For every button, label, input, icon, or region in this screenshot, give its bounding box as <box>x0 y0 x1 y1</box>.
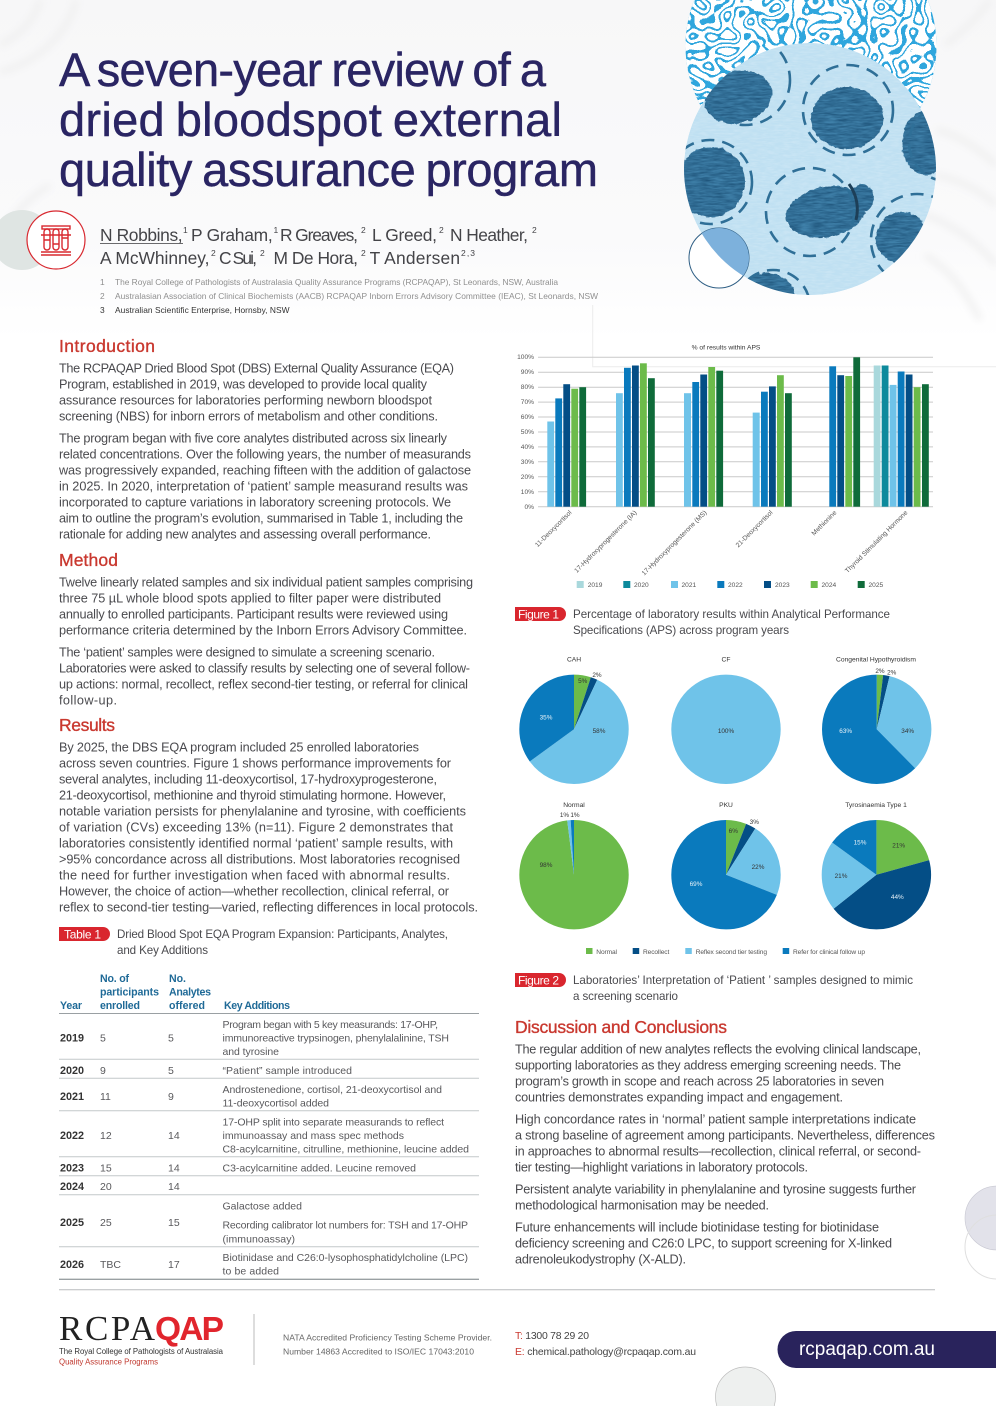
graphic: pattern circle <box>686 0 936 108</box>
figure 1 caption: Figure 1 <box>518 607 559 621</box>
row 2025: Recording calibrator lot numbers for: TSH and 17-OHP <box>222 1220 468 1232</box>
row 2026: to be added <box>222 1266 279 1278</box>
figure 1 caption: Specifications (APS) across program years <box>573 624 789 637</box>
pie: CAH <box>540 656 606 757</box>
row 2020: 9 <box>100 1065 106 1077</box>
bars: 17-Hydroxyprogesterone (MS) <box>684 367 723 507</box>
x axis labels: Thyroid Stimulating Hormone <box>844 509 910 575</box>
row 2020: 5 <box>168 1065 174 1077</box>
pie: Tyrosinaemia Type 1: 21% <box>835 873 848 880</box>
figure 1 caption <box>515 607 890 637</box>
y axis labels: 90% <box>521 369 534 376</box>
footer contact details: T: 1300 78 29 20 <box>515 1331 589 1342</box>
footer accreditation text: Number 14863 Accredited to ISO/IEC 17043:2010 <box>283 1346 474 1356</box>
text: results paragraph: of variation (CVs) exceeding 13% (n=11). Figure 2 demonstrates that <box>59 820 453 834</box>
pie: PKU: 3% <box>750 819 759 826</box>
y axis labels: 10% <box>521 489 534 496</box>
table header: No. <box>169 973 186 985</box>
affiliations: 2 <box>100 291 105 301</box>
row 2023: 15 <box>100 1162 112 1174</box>
text: discussion paragraph 2: in approaches to abnormal results—recollection, clinical referral, or second- <box>515 1144 921 1158</box>
panel: method <box>59 550 473 707</box>
row 2021: 11 <box>100 1091 111 1103</box>
row 2025: 25 <box>100 1217 112 1229</box>
y axis labels: 30% <box>521 459 534 466</box>
text: results paragraph: notable variation persists for phenylalanine and tyrosine, with coefficients <box>59 804 466 818</box>
footer contact details <box>515 1331 696 1358</box>
text: discussion paragraph 1: countries demonstrates expanding impact and engagement. <box>515 1090 843 1104</box>
footer website pill: rcpaqap.com.au <box>799 1339 935 1360</box>
pie: CAH: 58% <box>593 728 606 735</box>
authors: R Greaves, <box>280 225 358 245</box>
heading: introduction: Introduction <box>59 336 155 356</box>
pie: Congenital Hypothyroidism <box>836 656 916 757</box>
text: method paragraph 2: The ‘patient’ samples were designed to simulate a screening scenario. <box>59 645 435 659</box>
text: results paragraph: laboratories consistently identified normal ‘patient’ sample results, with <box>59 836 453 850</box>
table header: Year <box>60 1000 82 1012</box>
panel: introduction <box>58 336 471 541</box>
pie: Congenital Hypothyroidism: 63% <box>839 728 852 735</box>
footer logo: RCPAQAP: RCPA <box>59 1309 156 1348</box>
y axis labels: 0% <box>524 504 534 511</box>
x axis labels: 11-Deoxycortisol <box>534 509 574 549</box>
table 1 caption: Dried Blood Spot EQA Program Expansion: Participants, Analytes, <box>117 928 448 941</box>
table 1 <box>59 973 479 1279</box>
icon: test tubes in circle <box>0 210 85 270</box>
pie: Congenital Hypothyroidism: 34% <box>901 728 914 735</box>
authors: 1 <box>274 225 278 235</box>
row 2022: 17-OHP split into separate measurands to reflect <box>222 1116 444 1128</box>
x axis labels: 21-Deoxycortisol <box>735 509 775 549</box>
table 1 caption: and Key Additions <box>117 944 208 957</box>
text: discussion paragraph 4 <box>515 1220 892 1266</box>
text: method paragraph 2: Laboratories were asked to classify results by selecting one of several follow- <box>59 661 470 675</box>
authors: 2 <box>260 248 265 258</box>
text: discussion paragraph 1 <box>515 1042 921 1104</box>
affiliations: 3 <box>100 305 105 315</box>
affiliations: Australasian Association of Clinical Biochemists (AACB) RCPAQAP Inborn Errors Advisory Committee (IEAC), St Leonards, NSW <box>115 291 598 301</box>
row 2024: 2024 <box>60 1181 84 1193</box>
pie: Tyrosinaemia Type 1: 44% <box>891 894 904 901</box>
pie chart legend: Recollect <box>643 949 669 956</box>
text: introduction paragraph 2: related concentrations. Over the following years, the number of measurands <box>59 447 471 461</box>
pie: PKU: 69% <box>690 881 703 888</box>
figure 2 caption: Figure 2 <box>518 973 559 987</box>
table header: No. of <box>100 973 129 985</box>
pie chart legend <box>586 948 865 956</box>
row 2022: 14 <box>168 1130 180 1142</box>
affiliations: The Royal College of Pathologists of Australasia Quality Assurance Programs (RCPAQAP), St Leonards, NSW, Australia <box>115 277 558 287</box>
row 2019 <box>60 1019 449 1058</box>
row 2022: 2022 <box>60 1130 84 1142</box>
bars: 11-Deoxycortisol <box>547 384 586 507</box>
table header: Key Additions <box>224 1000 290 1012</box>
pie: PKU: PKU <box>719 802 733 809</box>
authors: 1 <box>183 225 188 235</box>
pie: Tyrosinaemia Type 1: 21% <box>892 842 905 850</box>
footer logo: RCPAQAP: Quality Assurance Programs <box>59 1358 158 1366</box>
pie: Tyrosinaemia Type 1: Tyrosinaemia Type 1 <box>845 802 907 809</box>
authors: 2 <box>532 225 537 235</box>
pie: CF <box>671 656 781 784</box>
affiliations: 1 <box>100 277 105 287</box>
bars: 17-Hydroxyprogesterone (IA) <box>616 363 655 507</box>
y axis labels: 100% <box>517 354 534 361</box>
pie chart legend: Reflex second tier testing <box>696 949 767 956</box>
bar chart legend: 2020 <box>634 582 649 589</box>
dashed rings <box>686 51 936 295</box>
text: discussion paragraph 2 <box>515 1112 935 1174</box>
pie: Tyrosinaemia Type 1 <box>835 802 907 902</box>
text: discussion paragraph 1: The regular addition of new analytes reflects the evolving clinical landscape, <box>515 1042 921 1056</box>
pie: CAH: 35% <box>540 714 553 722</box>
text: introduction paragraph 2: was progressively expanded, reaching fifteen with the addition of galactose <box>58 463 471 477</box>
text: method paragraph 1 <box>59 575 473 637</box>
pie: Normal <box>540 802 601 902</box>
text: discussion paragraph 3 <box>515 1182 917 1212</box>
graphic: dried blood spot photo <box>684 43 936 295</box>
pie: PKU <box>690 802 765 902</box>
x axis labels: Methionine <box>811 509 839 537</box>
row 2021: 11-deoxycortisol added <box>222 1097 329 1109</box>
bar chart legend: 2022 <box>728 582 743 589</box>
text: introduction paragraph 2: in 2025. In 2020, interpretation of ‘patient’ sample measurand results was <box>59 479 468 493</box>
row 2025: 15 <box>168 1217 180 1229</box>
affiliations: Australian Scientific Enterprise, Hornsby, NSW <box>115 305 290 315</box>
text: discussion paragraph 2: tier testing—highlight variations in laboratory protocols. <box>515 1160 808 1174</box>
text: results paragraph: reflex to second-tier testing—varied, reflecting differences in local protocols. <box>59 900 478 914</box>
table header: enrolled <box>100 1000 140 1012</box>
authors: 2,3 <box>461 248 475 258</box>
footer logo: RCPAQAP: QAP <box>155 1311 224 1348</box>
authors <box>100 225 537 268</box>
decorative circle bottom <box>716 1367 776 1406</box>
bars: Methionine <box>829 357 860 507</box>
row 2025: 2025 <box>60 1217 84 1229</box>
figure 2 caption <box>515 973 913 1003</box>
text: discussion paragraph 4: Future enhancements will include biotinidase testing for biotinidase <box>515 1220 879 1234</box>
table header <box>60 973 290 1012</box>
heading: results: Results <box>59 715 115 735</box>
row 2024: 20 <box>100 1181 112 1193</box>
row 2019: immunoreactive trypsinogen, phenylalalinine, TSH <box>222 1032 449 1044</box>
authors: N Heather, <box>450 225 528 245</box>
heading: method: Method <box>59 550 118 570</box>
text: method paragraph 2 <box>59 645 470 707</box>
authors: C Sui, <box>219 248 257 268</box>
row 2020 <box>60 1065 352 1077</box>
row 2025: Galactose added <box>222 1200 302 1212</box>
text: discussion paragraph 4: adrenoleukodystrophy (X-ALD). <box>515 1252 686 1266</box>
row 2022: 12 <box>100 1130 112 1142</box>
pie chart legend: Refer for clinical follow up <box>793 949 865 956</box>
row 2026 <box>60 1252 468 1278</box>
text: results paragraph: >95% concordance across all distributions. Most laboratories recognised <box>59 852 460 866</box>
chart title: % of results within APS <box>692 344 761 352</box>
pie: Congenital Hypothyroidism: 2% <box>875 668 885 675</box>
y axis labels: 50% <box>521 429 534 436</box>
pie: CAH: 2% <box>592 672 602 679</box>
bar chart legend: 2025 <box>868 582 884 589</box>
table header: offered <box>169 1000 205 1012</box>
row 2022 <box>60 1116 469 1155</box>
y axis labels: 80% <box>521 384 534 391</box>
y axis labels: 70% <box>521 399 534 406</box>
authors: 2 <box>361 248 366 258</box>
text: results paragraph: across seven countries. Figure 1 shows performance improvements for <box>59 756 452 770</box>
row 2026: 2026 <box>60 1259 84 1271</box>
text: discussion paragraph 1: program’s growth in scope and reach across 25 laboratories in seven <box>515 1074 884 1088</box>
text: discussion paragraph 4: deficiency screening and C26:0 LPC, to support screening for X-linked <box>515 1236 892 1250</box>
footer accreditation text <box>283 1332 492 1356</box>
row 2023: 2023 <box>60 1162 84 1174</box>
pie: Congenital Hypothyroidism: Congenital Hypothyroidism <box>836 656 916 664</box>
title <box>59 43 598 196</box>
text: introduction paragraph 1: The RCPAQAP Dried Blood Spot (DBS) External Quality Assurance (EQA) <box>59 361 454 375</box>
row 2021: 2021 <box>60 1091 84 1103</box>
pie: CAH: 5% <box>578 678 588 685</box>
y axis labels: 20% <box>521 474 534 481</box>
figure 1 caption: Percentage of laboratory results within Analytical Performance <box>573 608 890 621</box>
x axis labels: 17-Hydroxyprogesterone (IA) <box>573 509 638 575</box>
text: results paragraph: 21-deoxycortisol, methionine and thyroid stimulating hormone. However, <box>59 788 446 802</box>
authors: 2 <box>211 248 216 258</box>
row 2026: Biotinidase and C26:0-lysophosphatidylcholine (LPC) <box>222 1252 468 1264</box>
text: discussion paragraph 3: Persistent analyte variability in phenylalanine and tyrosine suggests further <box>515 1182 917 1196</box>
pie: PKU: 22% <box>752 864 765 871</box>
text: results paragraph: By 2025, the DBS EQA program included 25 enrolled laboratories <box>59 740 419 754</box>
pie: Normal: 98% <box>540 862 553 869</box>
row 2021: Androstenedione, cortisol, 21-deoxycortisol and <box>222 1084 442 1096</box>
row 2023: 14 <box>168 1162 180 1174</box>
row 2019: 2019 <box>60 1032 84 1044</box>
footer logo: RCPAQAP <box>59 1309 224 1366</box>
pie: Normal: 1% <box>560 812 569 819</box>
authors: A McWhinney, <box>100 248 210 268</box>
pie: PKU: 6% <box>729 828 738 835</box>
pie: Normal: 1% <box>570 812 580 819</box>
title: quality assurance program <box>59 143 598 196</box>
title: A seven-year review of a <box>59 43 547 96</box>
text: results paragraph: the need for further investigation when faced with abnormal results. <box>59 868 450 882</box>
pie: CAH: CAH <box>567 656 581 664</box>
footer contact details: E: chemical.pathology@rcpaqap.com.au <box>515 1347 696 1358</box>
affiliations <box>100 277 598 315</box>
panel: results <box>59 715 478 914</box>
y axis labels: 60% <box>521 414 534 421</box>
footer accreditation text: NATA Accredited Proficiency Testing Scheme Provider. <box>283 1332 492 1342</box>
blood spots <box>684 70 936 294</box>
row 2021 <box>60 1084 442 1109</box>
authors: P Graham, <box>191 225 273 245</box>
bar chart: percent of results within APS <box>517 305 996 589</box>
text: results paragraph: However, the choice of action—whether recollection, clinical referral, or <box>59 884 450 898</box>
pie: Normal: Normal <box>563 802 585 809</box>
authors: M De Hora, <box>274 248 358 268</box>
bars: 21-Deoxycortisol <box>753 375 792 507</box>
authors: T Andersen <box>370 248 460 268</box>
heading: discussion and conclusions: Discussion and Conclusions <box>515 1017 727 1037</box>
pie: Congenital Hypothyroidism: 2% <box>887 670 897 676</box>
text: discussion paragraph 3: methodological harmonisation may be needed. <box>515 1198 769 1212</box>
text: introduction paragraph 1: assurance resources for laboratories performing newborn bloodspot <box>59 393 432 407</box>
row 2026: 17 <box>168 1259 180 1271</box>
row 2023: C3-acylcarnitine added. Leucine removed <box>222 1162 416 1174</box>
bar chart legend: 2024 <box>822 582 837 589</box>
authors: 2 <box>361 225 366 235</box>
row 2019: and tyrosine <box>222 1046 279 1058</box>
text: method paragraph 1: performance criteria determined by the Inborn Errors Advisory Committee. <box>59 623 467 637</box>
row 2024: 14 <box>168 1181 180 1193</box>
row 2025 <box>60 1200 468 1245</box>
row 2022: C8-acylcarnitine, citrulline, methionine, leucine added <box>222 1143 469 1155</box>
title: dried bloodspot external <box>59 93 562 146</box>
pie: CF: 100% <box>718 728 734 735</box>
text: introduction paragraph 1 <box>59 361 454 423</box>
figure 2 caption: Laboratories’ Interpretation of ‘Patient ’ samples designed to mimic <box>573 974 913 987</box>
text: results paragraph <box>59 740 478 914</box>
x axis labels: 17-Hydroxyprogesterone (MS) <box>641 509 708 577</box>
decorative circles right edge <box>965 1186 996 1279</box>
x axis labels <box>534 509 910 577</box>
y axis labels <box>517 354 534 511</box>
text: results paragraph: several analytes, including 11-deoxycortisol, 17-hydroxyprogesterone, <box>59 772 437 786</box>
text: introduction paragraph 1: Program, established in 2019, was developed to provide local quality <box>59 377 428 391</box>
text: method paragraph 2: up actions: normal, recollect, reflex second-tier testing, or referral for clinical <box>59 677 468 691</box>
authors: L Greed, <box>372 225 437 245</box>
pie chart legend: Normal <box>596 949 618 956</box>
row 2025: (immunoassay) <box>222 1233 295 1245</box>
bar chart legend: 2023 <box>775 582 790 589</box>
panel: discussion and conclusions <box>515 1017 935 1266</box>
bar chart legend <box>577 581 884 589</box>
figure 2 caption: a screening scenario <box>573 990 678 1003</box>
text: introduction paragraph 2 <box>58 431 471 541</box>
text: discussion paragraph 2: High concordance rates in ‘normal’ patient sample interpretations indicate <box>515 1112 916 1126</box>
authors: 2 <box>439 225 444 235</box>
pie: Tyrosinaemia Type 1: 15% <box>854 840 867 846</box>
text: introduction paragraph 1: screening (NBS) for inborn errors of metabolism and other conditions. <box>59 409 438 423</box>
row 2022: immunoassay and mass spec methods <box>222 1130 404 1142</box>
pie: CF: CF <box>722 656 730 664</box>
row 2020: “Patient” sample introduced <box>222 1065 352 1077</box>
text: introduction paragraph 2: incorporated to capture variations in laboratory screening protocols. We <box>59 495 451 509</box>
row 2020: 2020 <box>60 1065 84 1077</box>
row 2024 <box>60 1181 180 1193</box>
footer website pill <box>778 1331 996 1368</box>
table header: Analytes <box>169 986 211 998</box>
graphic: overlapping small circle <box>689 228 749 288</box>
table 1 caption: Table 1 <box>64 927 101 941</box>
pie charts: interpretation of patient samples <box>540 656 916 956</box>
text: method paragraph 2: follow-up. <box>59 693 117 707</box>
text: introduction paragraph 2: rationale for adding new analytes and assessing overall performance. <box>59 527 431 541</box>
text: method paragraph 1: three 75 µL whole blood spots applied to filter paper were distributed <box>59 591 441 605</box>
row 2023 <box>60 1162 416 1174</box>
bar chart legend: 2021 <box>682 582 697 589</box>
text: introduction paragraph 2: aim to outline the program’s evolution, summarised in Table 1, including the <box>59 511 463 525</box>
text: discussion paragraph 1: supporting laboratories as they address emerging screening needs. The <box>515 1058 901 1072</box>
footer logo: RCPAQAP: The Royal College of Pathologists of Australasia <box>59 1347 224 1356</box>
text: method paragraph 1: Twelve linearly related samples and six individual patient samples comprising <box>59 575 473 589</box>
table header: participants <box>100 986 159 998</box>
authors: N Robbins, <box>100 225 183 245</box>
bar chart legend: 2019 <box>588 582 603 589</box>
row 2019: 5 <box>100 1032 106 1044</box>
bars: Thyroid Stimulating Hormone <box>874 366 929 507</box>
text: discussion paragraph 2: a strong baseline of agreement among participants. Nevertheless, differences <box>515 1128 935 1142</box>
row 2019: 5 <box>168 1032 174 1044</box>
row 2026: TBC <box>100 1259 121 1271</box>
y axis labels: 40% <box>521 444 534 451</box>
text: method paragraph 1: annually to enrolled participants. Participant results were reviewed using <box>59 607 448 621</box>
table 1 caption <box>59 927 448 957</box>
row 2021: 9 <box>168 1091 174 1103</box>
text: introduction paragraph 2: The program began with five core analytes distributed across six linearly <box>59 431 448 445</box>
row 2019: Program began with 5 key measurands: 17-OHP, <box>222 1019 438 1031</box>
